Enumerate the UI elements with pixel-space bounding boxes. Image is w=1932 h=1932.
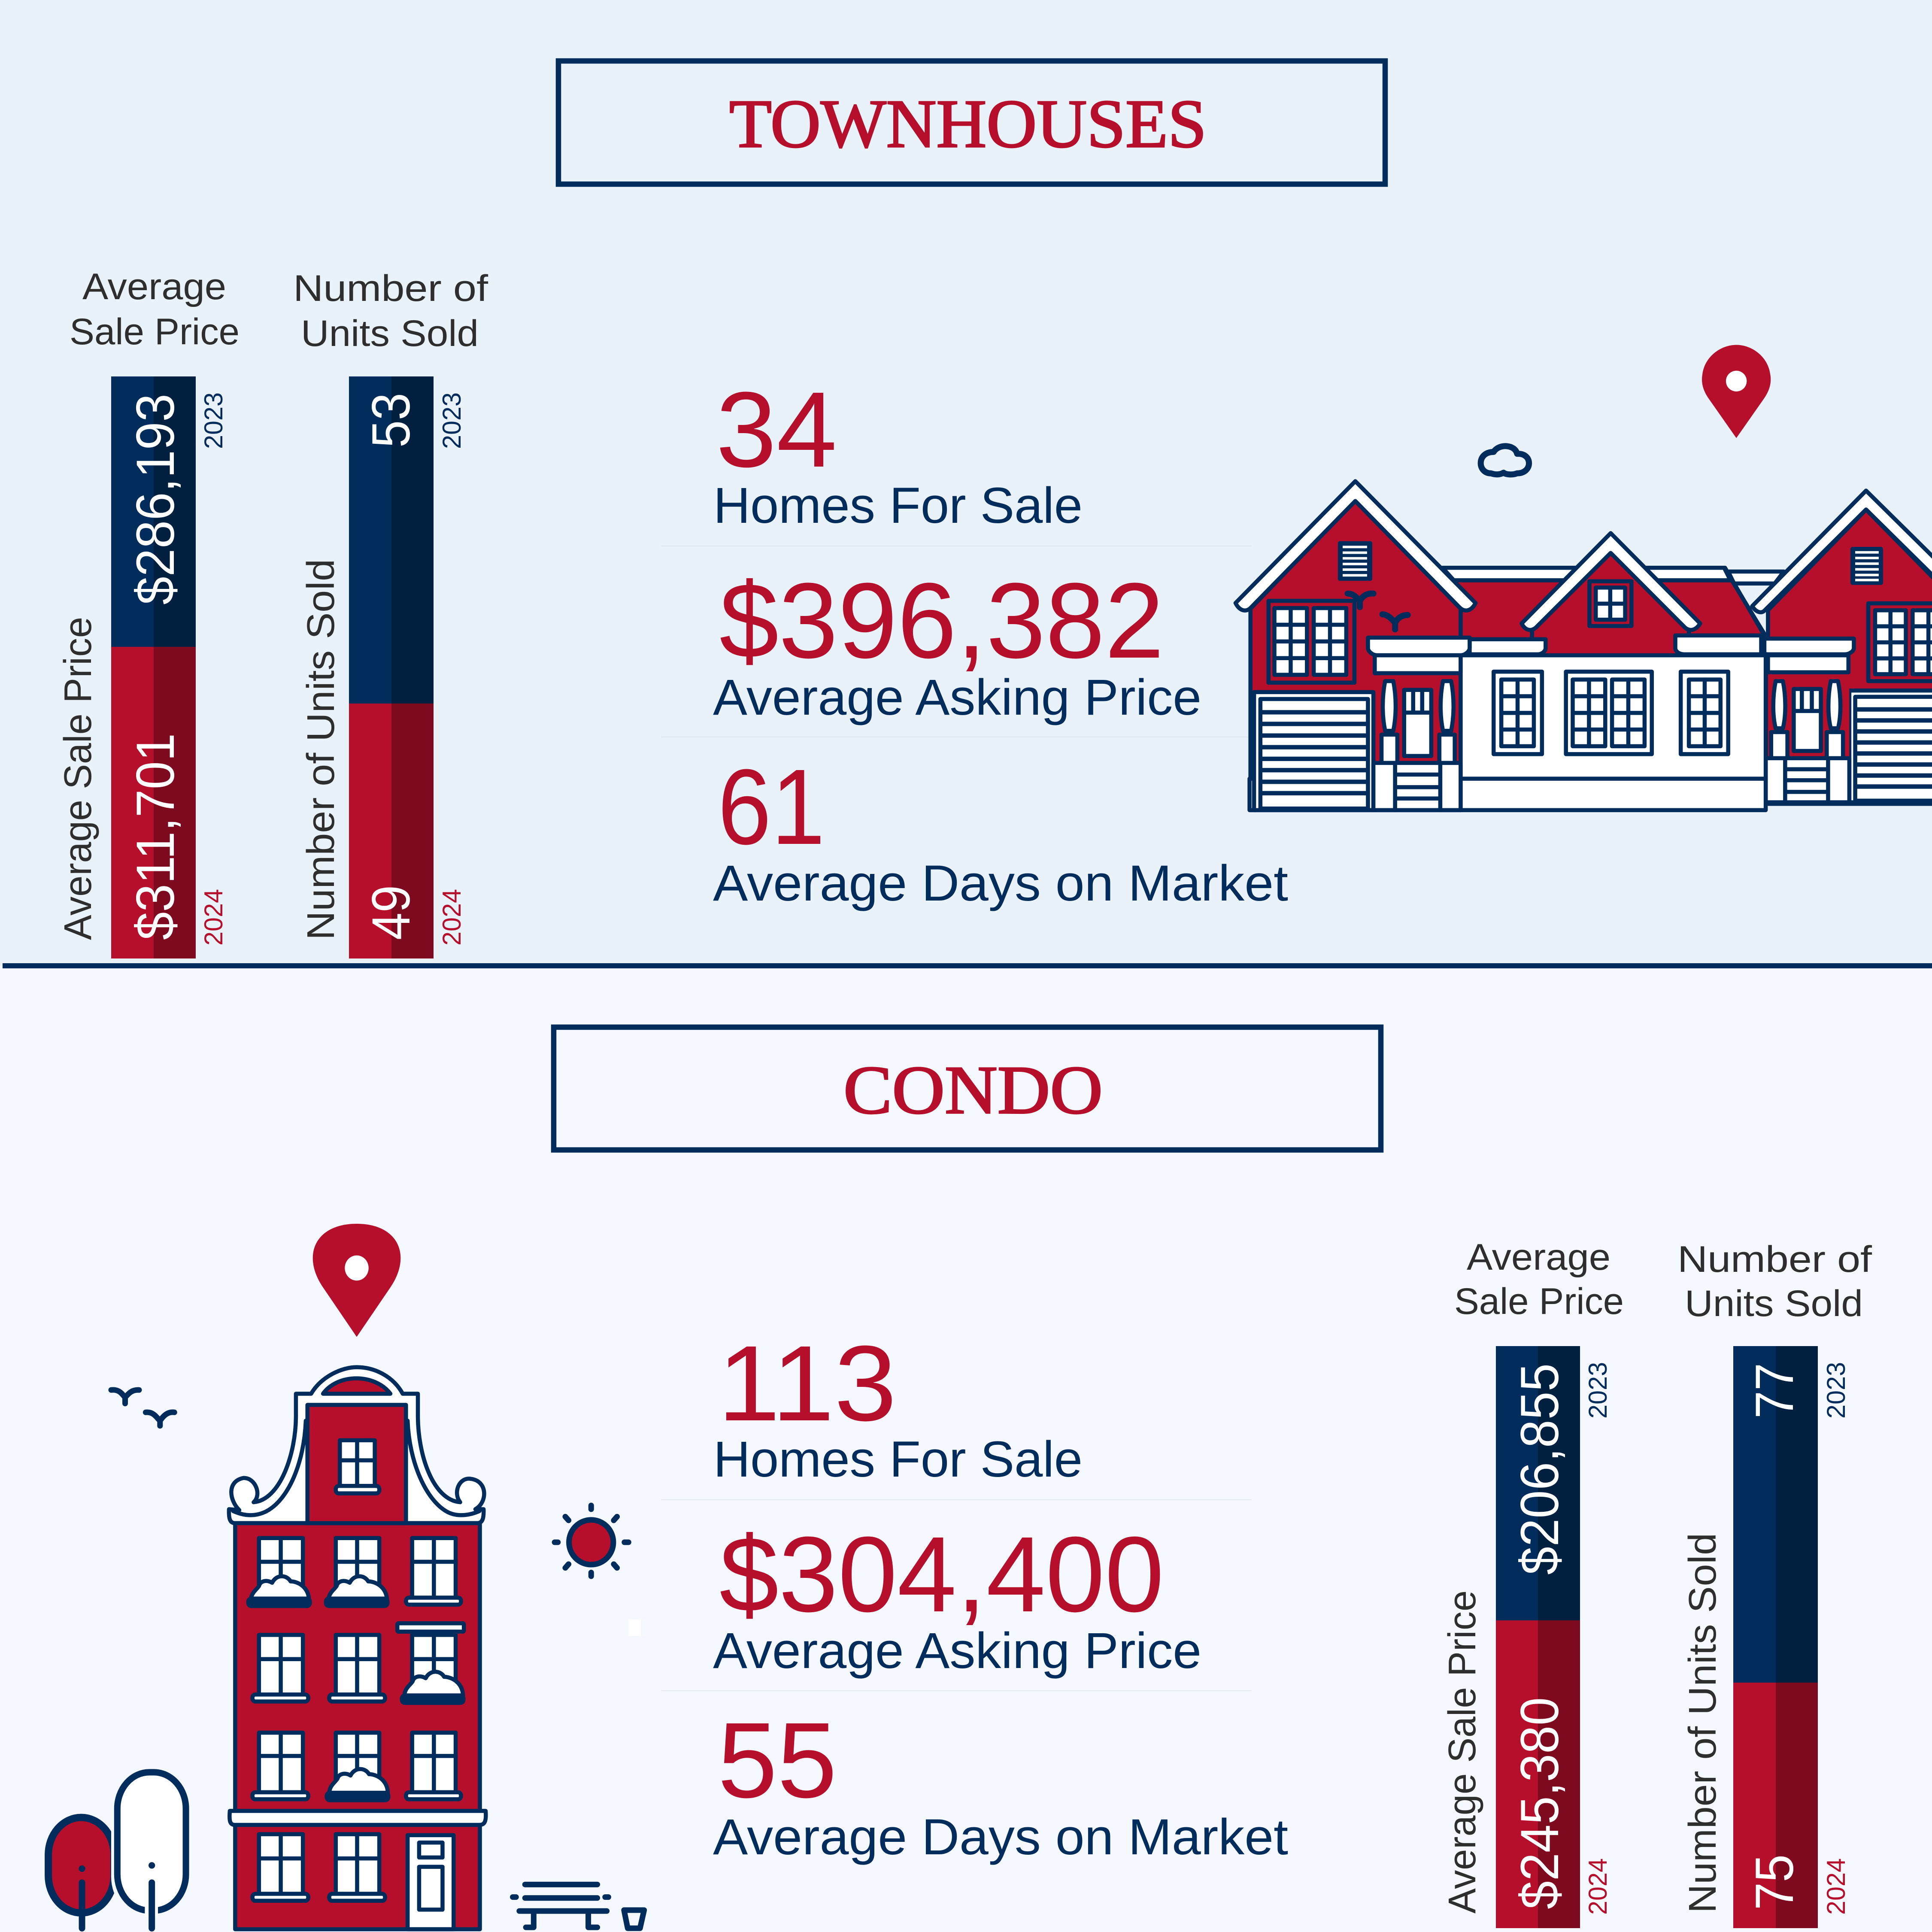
heading: average sale price [1454,1237,1624,1322]
heading: average sale price: Sale Price [1454,1281,1624,1322]
stat: average days on market: 55 [718,1700,837,1820]
bar chart: average sale price: $245,380 [1510,1697,1570,1909]
stat: average asking price: Average Asking Price [713,1623,1201,1679]
stat: average days on market [713,1700,1288,1865]
heading: number of units sold: Number of [1677,1239,1872,1280]
stat: average asking price: Average Asking Price [713,669,1201,726]
icon: sun [555,1505,628,1576]
icon: birds [1348,594,1408,629]
flower boxes [248,1576,464,1800]
heading: number of units sold [293,268,488,354]
stat: homes for sale [713,1323,1083,1488]
title box: condo: CONDO [843,1052,1103,1128]
window row 3 [252,1733,461,1799]
left house [1235,481,1476,810]
stat: homes for sale: Homes For Sale [713,477,1083,534]
bar chart: average sale price: 2023 [199,392,228,449]
divider between sections [3,963,1932,968]
stat: average asking price [713,1514,1201,1679]
ground floor [252,1834,454,1929]
icon: location pin [313,1224,400,1337]
title box: townhouses [558,61,1385,184]
bar chart: number of units sold: 2024 [1822,1858,1850,1915]
icon: waste bin [624,1910,644,1928]
title box: townhouses: TOWNHOUSES [729,85,1207,162]
bar chart: average sale price: Average Sale Price [57,617,100,940]
stat: average asking price [713,561,1201,726]
illustration: condo building scene [49,1224,644,1929]
window row 1 [259,1538,461,1604]
icon: cloud [1481,446,1529,474]
stat: average days on market [713,747,1288,912]
stat: homes for sale: 34 [716,370,837,489]
stat: average days on market: Average Days on Market [713,1809,1288,1865]
icon: white tree [111,1768,191,1928]
bar chart: number of units sold: Number of Units Sold [1681,1533,1724,1913]
panel: townhouses [0,0,1932,966]
heading: average sale price: Average [82,266,226,307]
bar chart: number of units sold [300,376,466,958]
bar chart: average sale price: $311,701 [126,733,185,940]
bar chart: number of units sold [1681,1346,1850,1928]
stat: homes for sale: Homes For Sale [713,1431,1083,1488]
stat: average days on market: Average Days on Market [713,855,1288,912]
heading: number of units sold: Number of [293,268,488,309]
stat: average days on market: 61 [718,747,825,867]
icon: red tree [49,1817,114,1928]
icon: bench [513,1884,608,1927]
center house [1443,533,1766,810]
bar chart: number of units sold: 53 [361,393,421,448]
icon: location pin [1702,345,1771,438]
heading: average sale price: Average [1467,1237,1611,1278]
building gable [229,1367,484,1523]
stat: homes for sale [713,370,1083,534]
stat: homes for sale: 113 [718,1323,897,1443]
bar chart: average sale price [1441,1346,1612,1928]
heading: average sale price [70,266,240,352]
bar chart: average sale price [57,376,228,958]
building body [235,1405,480,1929]
bar chart: average sale price: $206,855 [1510,1363,1570,1575]
illustration: row of townhouses [1235,345,1932,810]
bar chart: number of units sold: 2023 [437,392,466,449]
bar chart: average sale price: 2024 [199,889,228,946]
right house [1728,491,1932,804]
bar chart: average sale price: 2024 [1583,1858,1612,1915]
heading: number of units sold: Units Sold [1685,1283,1863,1324]
bar chart: number of units sold: 77 [1745,1363,1805,1419]
stat: average asking price: $304,400 [719,1514,1164,1634]
icon: birds [111,1390,174,1426]
bar chart: number of units sold: Number of Units Sold [300,559,343,940]
heading: number of units sold: Units Sold [301,313,479,354]
bar chart: number of units sold: 49 [361,885,421,940]
bar chart: number of units sold: 2023 [1822,1362,1850,1419]
cornice [230,1811,486,1825]
bar chart: average sale price: 2023 [1583,1362,1612,1419]
panel: condo [0,966,1932,1932]
window row 2 [252,1623,464,1701]
bar chart: number of units sold: 75 [1745,1854,1805,1910]
heading: number of units sold [1677,1239,1872,1324]
bar chart: number of units sold: 2024 [437,889,466,946]
title box: condo [554,1027,1381,1150]
small white square [628,1620,641,1636]
stat: average asking price: $396,382 [719,561,1164,680]
bar chart: average sale price: Average Sale Price [1441,1590,1484,1914]
heading: average sale price: Sale Price [70,311,240,352]
bar chart: average sale price: $286,193 [126,394,185,605]
